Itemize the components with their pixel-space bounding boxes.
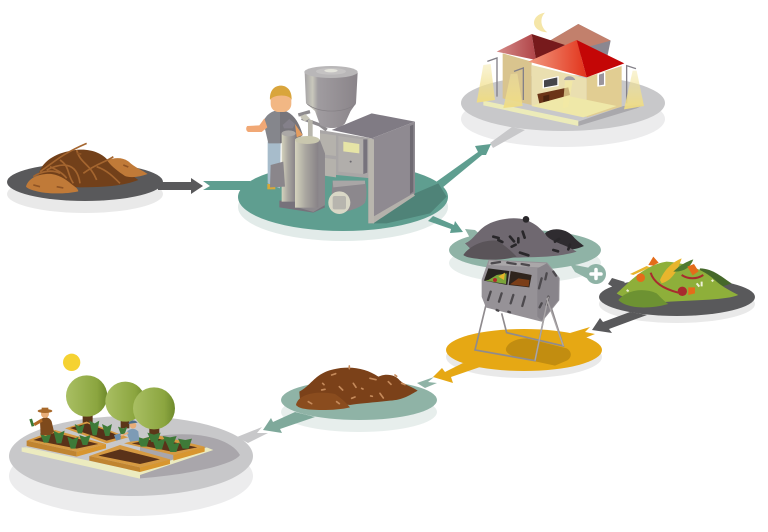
plate: garden [9,416,253,496]
arrow: machine to house [436,127,525,188]
plus badge [570,264,606,284]
operator [246,86,303,189]
icon: wood chip pile [26,143,148,193]
plate: char pile [449,230,601,270]
sun [63,354,80,371]
blower [332,181,366,212]
plate: wood chips [7,163,163,201]
main house [532,65,587,117]
ground shadow [140,434,240,478]
garden beds [27,422,205,472]
stand [475,297,563,361]
plate: machine [238,163,448,231]
stand front [535,297,563,361]
left house [503,53,532,105]
icon: gasifier machine with operator [246,66,447,223]
gauge assembly [298,112,327,130]
arrow: wood to machine [158,178,250,194]
plate: compost [281,380,437,420]
icon: compost pile [296,366,418,410]
hopper [305,73,358,128]
plate: house [461,75,665,131]
street lamps [477,58,644,109]
gardener right [114,421,139,442]
gardener left [29,408,54,435]
arrow: compost to garden [237,377,437,443]
icon: compost tumbler [475,261,571,366]
platform [483,103,643,126]
plate shadows [7,91,755,516]
plants [40,421,192,452]
icon: green waste pile [617,257,738,307]
trees [66,375,175,437]
icon: char pile [463,216,584,260]
plate: composter [446,329,602,371]
tumbler shadow [506,338,571,366]
cabinet [332,113,415,138]
moon [534,13,547,32]
arrow: machine to char pile [428,216,482,238]
arrow: composter to compost [433,327,595,383]
icon: garden scene [22,354,240,479]
machine shadow [370,183,447,223]
back house [550,24,611,57]
icon: house at night [477,13,644,126]
tanks [279,201,325,213]
arrow: green waste to composter [592,278,647,333]
drum [483,261,559,321]
plate: green waste [599,278,755,316]
